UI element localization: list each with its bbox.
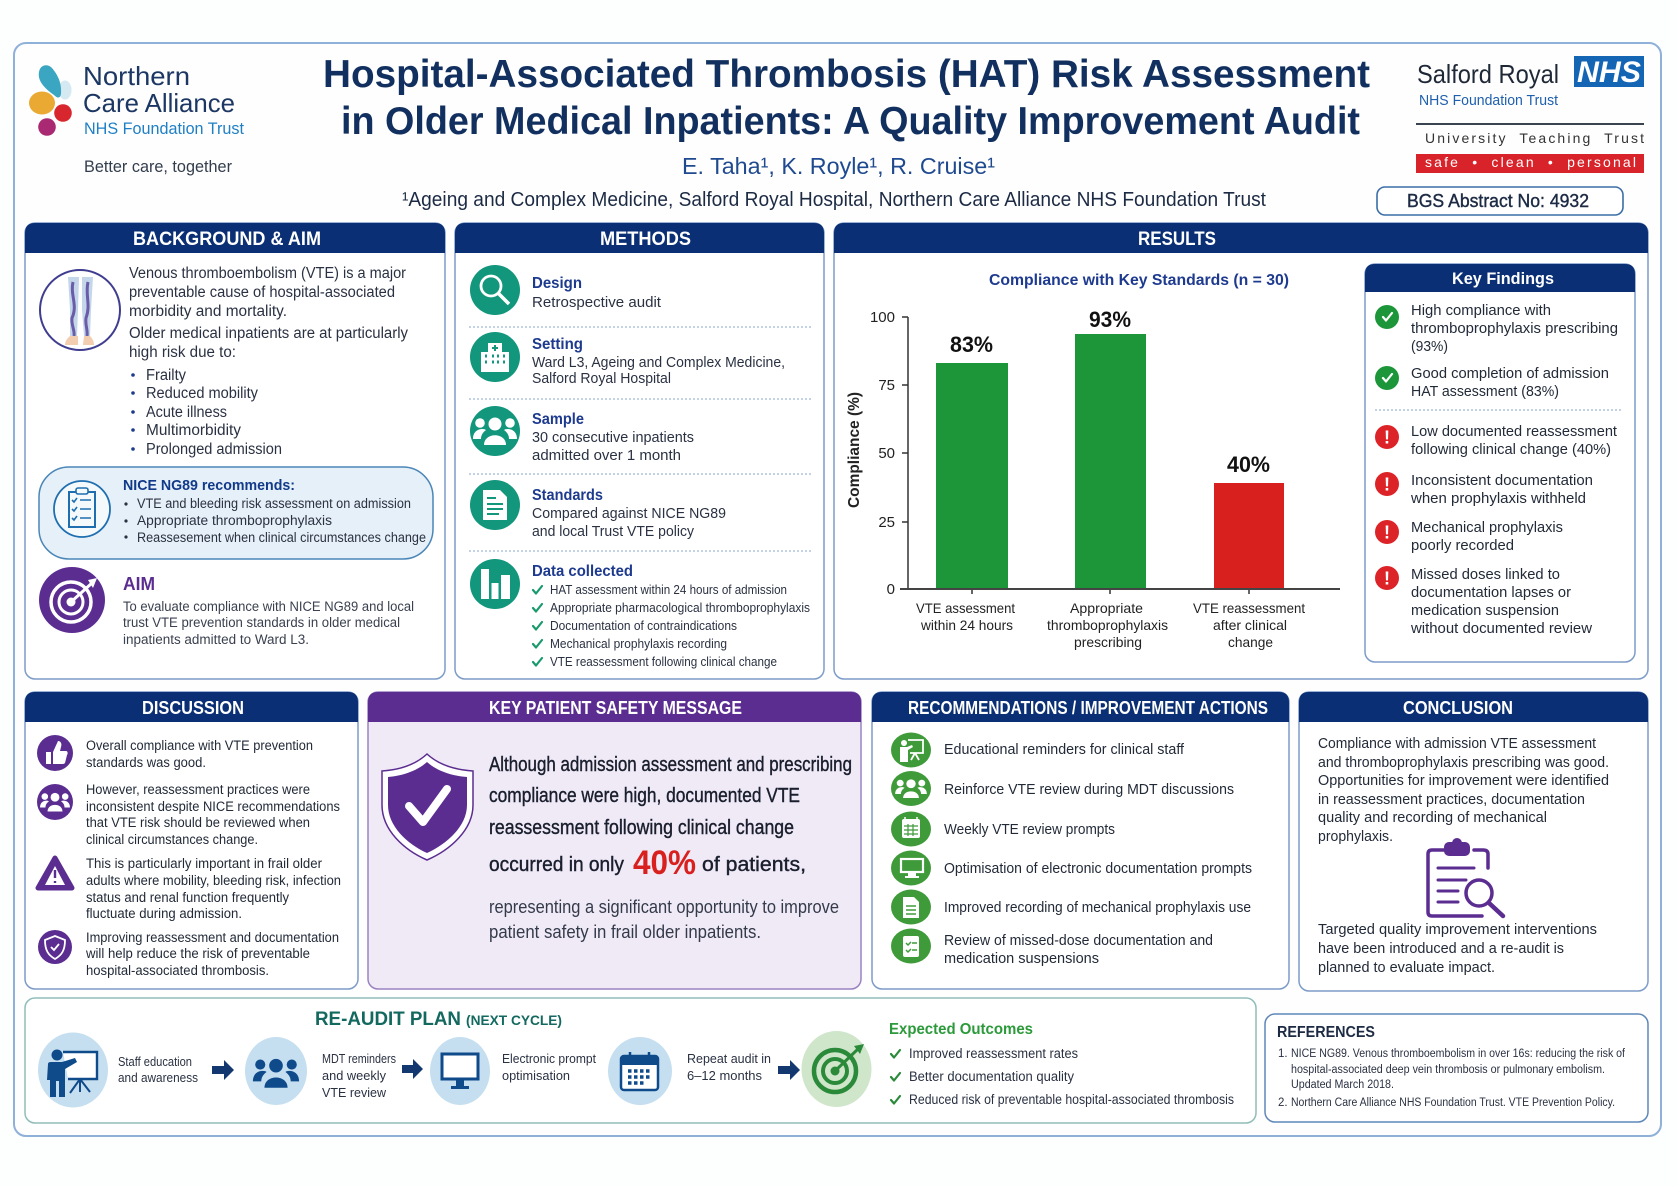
text: discussion: inconsistent despite NICE recommendations (86, 799, 340, 814)
icon: green target (802, 1031, 872, 1107)
heading: re-audit plan (315, 1009, 562, 1030)
text: recommendations: Improved recording of mechanical prophylaxis use (944, 899, 1251, 916)
list: risk factors: Reduced mobility (146, 385, 258, 402)
heading: re-audit plan: RE-AUDIT PLAN (315, 1009, 461, 1030)
item: sample (470, 406, 694, 464)
text: findings: without documented review (1410, 621, 1593, 637)
item: design: Design (532, 275, 582, 292)
text: conclusion bottom: Targeted quality improvement interventions (1318, 921, 1597, 938)
callout: NICE NG89: Appropriate thromboprophylaxis (137, 513, 332, 528)
panel: results (834, 223, 1648, 679)
icon: monitor (901, 859, 923, 878)
bar chart: compliance: VTE reassessment (1193, 600, 1305, 616)
text: main message: of patients, (702, 854, 806, 876)
text: discussion (85, 738, 341, 978)
icon: legs with veins (40, 270, 120, 350)
icons: negative findings: ! (1384, 474, 1390, 494)
step: MDT reminders: MDT reminders (322, 1051, 396, 1066)
text: conclusion top: in reassessment practices, documentation (1318, 791, 1585, 808)
title: in Older Medical Inpatients: A Quality Improvement Audit (341, 100, 1360, 143)
step: MDT reminders: VTE review (322, 1085, 387, 1100)
bar chart: compliance: 40% (1227, 452, 1270, 477)
text: findings: Good completion of admission (1411, 366, 1609, 382)
icon: document (903, 897, 919, 918)
arrow (402, 1059, 423, 1079)
title (323, 53, 1370, 143)
panel: references (1265, 1014, 1648, 1122)
abstract number box: BGS Abstract No: 4932 (1407, 191, 1589, 211)
icon: thumbs up (37, 735, 73, 771)
item: standards: and local Trust VTE policy (532, 524, 695, 540)
step: electronic prompt (430, 1037, 596, 1105)
list: risk factors: Prolonged admission (146, 441, 282, 458)
callout: NICE NG89: NICE NG89 recommends: (123, 477, 295, 494)
step: staff education: and awareness (118, 1070, 198, 1085)
text: discussion: will help reduce the risk of preventable (85, 946, 310, 961)
text: reference list: NICE NG89. Venous thromboembolism in over 16s: reducing the risk of (1291, 1048, 1626, 1060)
item: sample: 30 consecutive inpatients (532, 430, 694, 446)
bar chart: compliance: 0 (887, 581, 895, 598)
text: discussion: status and renal function frequently (86, 890, 289, 905)
step: MDT reminders: and weekly (322, 1068, 386, 1083)
list: risk factors (131, 367, 282, 458)
panel: key patient safety message (368, 692, 861, 989)
text: findings: following clinical change (40%) (1411, 442, 1611, 458)
icons: negative findings: ! (1384, 428, 1390, 448)
text: reference list (1278, 1048, 1626, 1109)
abstract number box (1377, 187, 1623, 215)
step: staff education (38, 1032, 198, 1108)
icons: negative findings (1375, 425, 1399, 590)
text: introduction: high risk due to: (129, 344, 236, 361)
text: conclusion bottom: planned to evaluate impact. (1318, 959, 1495, 976)
item: standards: Compared against NICE NG89 (532, 506, 726, 522)
expected outcomes (889, 1021, 1234, 1107)
text: recommendations: Reinforce VTE review during MDT discussions (944, 781, 1234, 798)
heading: results: RESULTS (1138, 229, 1216, 250)
text: discussion: adults where mobility, bleeding risk, infection (86, 873, 341, 888)
logo: Northern Care Alliance: NHS Foundation Trust (84, 119, 244, 138)
arrow (778, 1060, 800, 1080)
text: recommendations: medication suspensions (944, 950, 1099, 967)
text: main message (489, 754, 852, 882)
text: reference list: hospital-associated deep vein thrombosis or pulmonary embolism. (1291, 1064, 1605, 1076)
text: findings: when prophylaxis withheld (1410, 491, 1586, 507)
logo: Northern Care Alliance: Better care, together (84, 157, 232, 176)
bar chart: compliance: Appropriate (1070, 600, 1143, 616)
logo: Salford Royal NHS (1416, 56, 1644, 173)
text: introduction: preventable cause of hospital-associated (129, 284, 395, 301)
heading: recommendations: RECOMMENDATIONS / IMPROVEMENT ACTIONS (908, 698, 1268, 718)
arrow (212, 1060, 234, 1080)
icon: clipboard (54, 481, 110, 537)
expected outcomes: Expected Outcomes (889, 1021, 1033, 1038)
text: main message: reassessment following clinical change (489, 817, 794, 839)
bar chart: compliance: change (1228, 634, 1273, 650)
text: recommendations: Educational reminders for clinical staff (944, 741, 1185, 758)
text: discussion: fluctuate during admission. (86, 906, 242, 921)
text: conclusion top: prophylaxis. (1318, 828, 1393, 845)
text: introduction: Older medical inpatients are at particularly (129, 325, 408, 342)
text: findings: thromboprophylaxis prescribing (1411, 321, 1618, 337)
text: reference list: Updated March 2018. (1291, 1079, 1394, 1091)
bar chart: compliance: within 24 hours (920, 617, 1013, 633)
step: MDT reminders (245, 1037, 396, 1105)
panel: discussion (25, 692, 358, 989)
item: data collected: Appropriate pharmacological thromboprophylaxis (550, 601, 810, 615)
item: standards: Standards (532, 487, 603, 504)
text: discussion: However, reassessment practices were (86, 782, 310, 797)
list: risk factors: Acute illness (146, 404, 227, 421)
heading: re-audit plan: (NEXT CYCLE) (466, 1012, 562, 1028)
text: reference list: 1. (1278, 1048, 1288, 1060)
text: discussion: This is particularly important in frail older (86, 856, 322, 871)
callout: NICE NG89: Reassesement when clinical circumstances change (137, 530, 426, 545)
text: findings: Low documented reassessment (1411, 424, 1617, 440)
item: setting (470, 332, 785, 387)
icon: calendar (902, 817, 920, 838)
text: introduction (129, 265, 408, 361)
text: recommendations: Weekly VTE review prompts (944, 821, 1115, 838)
text: findings: High compliance with (1411, 303, 1551, 319)
heading: references: REFERENCES (1277, 1024, 1375, 1041)
text: supporting message: representing a significant opportunity to improve (489, 897, 839, 917)
icon: shield check (382, 754, 473, 860)
step: repeat audit (608, 1037, 771, 1105)
text: introduction: morbidity and mortality. (129, 303, 287, 320)
text: conclusion top: quality and recording of mechanical (1318, 809, 1547, 826)
panel: methods (455, 223, 824, 679)
aim block: AIM (123, 574, 155, 594)
panel: key findings (1365, 264, 1635, 662)
step: electronic prompt: optimisation (502, 1068, 570, 1083)
logo: Salford Royal NHS: University Teaching Trust (1425, 130, 1644, 146)
item: design: Retrospective audit (532, 295, 661, 311)
text: introduction: Venous thromboembolism (VTE) is a major (129, 265, 406, 282)
text: main message: compliance were high, documented VTE (489, 785, 800, 807)
text: findings: Inconsistent documentation (1411, 473, 1593, 489)
heading: key patient safety message: KEY PATIENT SAFETY MESSAGE (489, 698, 742, 718)
heading: discussion: DISCUSSION (142, 698, 244, 718)
bar chart: compliance (846, 272, 1340, 650)
logo: Northern Care Alliance: Care Alliance (83, 88, 235, 118)
panel: key findings: Key Findings (1452, 269, 1554, 288)
icons: negative findings: ! (1384, 522, 1390, 542)
aim block: inpatients admitted to Ward L3. (123, 632, 309, 647)
icons: positive findings (1375, 305, 1399, 390)
text: recommendations (944, 741, 1252, 967)
item: sample: admitted over 1 month (532, 448, 681, 464)
callout: NICE NG89: VTE and bleeding risk assessment on admission (137, 496, 411, 511)
step: repeat audit: 6–12 months (687, 1068, 762, 1083)
step: electronic prompt: Electronic prompt (502, 1051, 596, 1066)
heading: methods: METHODS (600, 229, 691, 250)
item: data collected: Data collected (532, 563, 633, 580)
logo: Salford Royal NHS: Salford Royal (1417, 59, 1559, 89)
heading: conclusion: CONCLUSION (1403, 698, 1513, 718)
text: findings: documentation lapses or (1411, 585, 1571, 601)
icon: shield (38, 930, 72, 964)
text: discussion: hospital-associated thrombosis. (86, 963, 269, 978)
text: conclusion top: Opportunities for improvement were identified (1318, 772, 1609, 789)
list: risk factors: Multimorbidity (146, 422, 241, 439)
text: findings: medication suspension (1411, 603, 1559, 619)
text: findings: Missed doses linked to (1411, 567, 1560, 583)
icons: green action circles (891, 732, 931, 964)
item: data collected: Mechanical prophylaxis recording (550, 637, 727, 651)
bar chart: compliance: 50 (878, 445, 895, 462)
bar chart: compliance: prescribing (1074, 634, 1142, 650)
text: findings: Mechanical prophylaxis (1411, 520, 1563, 536)
bar chart: compliance: Compliance with Key Standards (n = 30) (989, 272, 1289, 289)
text: discussion: clinical circumstances change. (86, 832, 258, 847)
icon: group (37, 784, 73, 820)
item: sample: Sample (532, 411, 584, 428)
item: data collected: HAT assessment within 24 hours of admission (550, 583, 787, 597)
text: discussion: that VTE risk should be reviewed when (86, 815, 310, 830)
text: conclusion top: and thromboprophylaxis prescribing was good. (1318, 754, 1609, 771)
bar chart: compliance: 83% (950, 332, 993, 357)
panel: conclusion (1299, 692, 1648, 991)
bar chart: compliance: 25 (878, 514, 895, 531)
text: conclusion bottom: have been introduced and a re-audit is (1318, 940, 1564, 957)
item: data collected: VTE reassessment following clinical change (550, 655, 777, 669)
bar chart: compliance: VTE assessment (916, 600, 1015, 616)
bar chart: compliance: Compliance (%) (846, 392, 863, 508)
item: setting: Ward L3, Ageing and Complex Medicine, (532, 355, 785, 371)
text: discussion: Overall compliance with VTE prevention (86, 738, 313, 753)
icon: team (895, 779, 927, 798)
panel: recommendations (872, 692, 1289, 989)
logo: Salford Royal NHS: NHS (1577, 56, 1641, 89)
icon: teacher (900, 740, 923, 762)
logo: Salford Royal NHS: NHS Foundation Trust (1419, 92, 1559, 109)
text: discussion: standards was good. (86, 755, 206, 770)
bar chart: compliance: thromboprophylaxis (1047, 617, 1168, 633)
item: design (470, 265, 661, 315)
text: findings: HAT assessment (83%) (1411, 384, 1559, 400)
logo: Northern Care Alliance: Northern (83, 61, 190, 91)
text: findings: poorly recorded (1411, 538, 1514, 554)
title: Hospital-Associated Thrombosis (HAT) Risk Assessment (323, 53, 1370, 96)
icons: negative findings: ! (1384, 568, 1390, 588)
expected outcomes: Reduced risk of preventable hospital-associated thrombosis (909, 1092, 1234, 1107)
text: supporting message: patient safety in frail older inpatients. (489, 922, 761, 942)
text: findings: (93%) (1411, 339, 1448, 355)
step: repeat audit: Repeat audit in (687, 1051, 771, 1066)
item: data collected: Documentation of contraindications (550, 619, 737, 633)
text: main message: Although admission assessment and prescribing (489, 754, 852, 776)
text: discussion: Improving reassessment and documentation (86, 930, 339, 945)
item: data collected (470, 559, 810, 669)
item: standards (470, 480, 726, 540)
list: risk factors: Frailty (146, 367, 186, 384)
authors: E. Taha¹, K. Royle¹, R. Cruise¹ (682, 153, 995, 179)
text: findings (1410, 303, 1618, 637)
panel: background and aim (25, 223, 445, 679)
heading: background and aim: BACKGROUND & AIM (133, 229, 321, 250)
bar chart: compliance: 75 (878, 377, 895, 394)
bar chart: compliance: 100 (870, 309, 895, 326)
icon: warning (38, 858, 72, 888)
text: main message: occurred in only (489, 854, 624, 876)
logo: Northern Care Alliance (29, 61, 244, 176)
text: conclusion bottom (1318, 921, 1597, 976)
text: conclusion top (1318, 735, 1609, 845)
text: supporting message (489, 897, 839, 942)
affiliation: ¹Ageing and Complex Medicine, Salford Royal Hospital, Northern Care Alliance NHS Foundation Trust (402, 189, 1266, 211)
bar chart: compliance: after clinical (1213, 617, 1287, 633)
item: setting: Setting (532, 336, 583, 353)
aim block (39, 567, 414, 647)
text: main message: 40% (633, 844, 696, 882)
icon: checklist (903, 936, 919, 957)
text: recommendations: Review of missed-dose documentation and (944, 932, 1213, 949)
logo: Salford Royal NHS: safe • clean • personal (1425, 154, 1636, 170)
step: staff education: Staff education (118, 1054, 192, 1069)
aim block: trust VTE prevention standards in older medical (123, 615, 400, 630)
bar chart: compliance: 93% (1089, 307, 1131, 332)
icon: clipboard with magnifier (1428, 839, 1503, 916)
expected outcomes: Better documentation quality (909, 1069, 1074, 1084)
aim block: To evaluate compliance with NICE NG89 and local (123, 599, 414, 614)
icon: target (39, 567, 105, 633)
text: reference list: 2. (1278, 1097, 1288, 1109)
expected outcomes: Improved reassessment rates (909, 1046, 1078, 1061)
callout: NICE NG89 (39, 467, 433, 559)
panel: re-audit plan (25, 998, 1256, 1123)
text: recommendations: Optimisation of electronic documentation prompts (944, 860, 1252, 877)
text: reference list: Northern Care Alliance NHS Foundation Trust. VTE Prevention Policy. (1291, 1097, 1615, 1109)
item: setting: Salford Royal Hospital (532, 371, 671, 387)
text: conclusion top: Compliance with admission VTE assessment (1318, 735, 1597, 752)
